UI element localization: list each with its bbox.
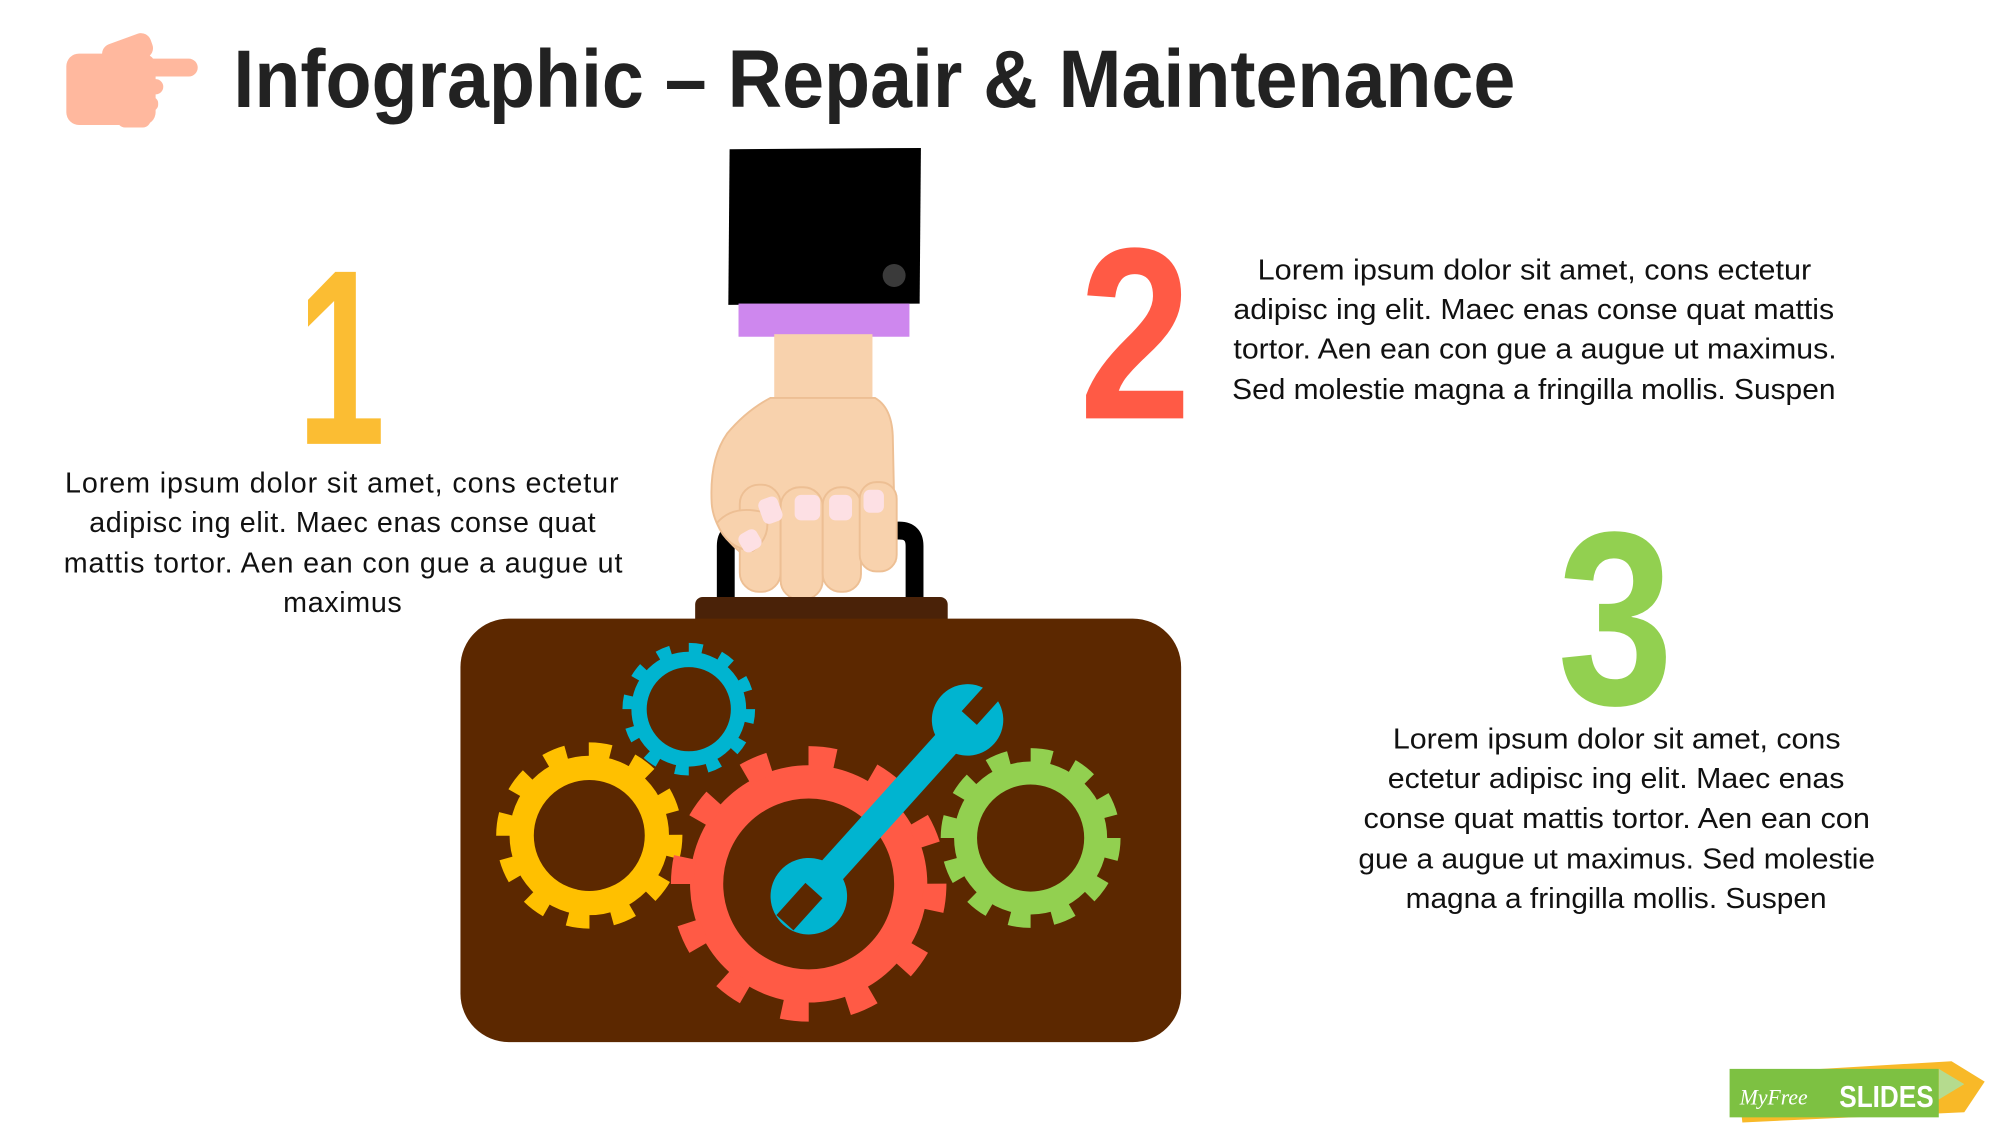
logo: MyFreeSlides <box>1730 1061 1985 1122</box>
text block 3: ectetur adipisc ing elit. Maec enas <box>1388 763 1844 795</box>
number 3: 3 <box>1557 481 1673 757</box>
text block 2 <box>1232 254 1837 406</box>
text block 2: Lorem ipsum dolor sit amet, cons ectetur <box>1258 254 1812 286</box>
text block 3 <box>1358 724 1875 915</box>
gear: teal small <box>629 649 749 769</box>
nails <box>736 490 884 555</box>
handle <box>726 531 915 599</box>
logo: MyFreeSlides: MyFree <box>1739 1086 1808 1110</box>
case <box>460 619 1181 1042</box>
text block 3: conse quat mattis tortor. Aen ean con <box>1364 803 1870 835</box>
text block 3: Lorem ipsum dolor sit amet, cons <box>1393 724 1841 756</box>
icon: wrench <box>755 660 1027 950</box>
text block 3: magna a fringilla mollis. Suspen <box>1406 883 1827 915</box>
lid band <box>695 597 948 628</box>
illustration: hand holding toolbox <box>460 148 1181 1042</box>
text block 1: maximus <box>283 587 402 619</box>
text block 2: adipisc ing elit. Maec enas conse quat mattis <box>1233 294 1834 326</box>
text block 1: adipisc ing elit. Maec enas conse quat <box>89 507 596 539</box>
text block 3: gue a augue ut maximus. Sed molestie <box>1358 844 1875 876</box>
text block 2: Sed molestie magna a fringilla mollis. Suspen <box>1232 374 1835 406</box>
gear: yellow <box>505 751 673 920</box>
gear: green <box>949 756 1112 920</box>
sleeve <box>728 148 921 305</box>
cuff <box>739 304 909 337</box>
text block 2: tortor. Aen ean con gue a augue ut maximus. <box>1233 333 1837 365</box>
icon: pointing hand <box>66 30 198 128</box>
text block 1 <box>64 467 622 619</box>
text block 1: mattis tortor. Aen ean con gue a augue ut <box>64 548 622 580</box>
hand <box>711 334 897 599</box>
logo: MyFreeSlides: SLIDES <box>1839 1080 1934 1114</box>
number 2: 2 <box>1079 196 1191 470</box>
text block 1: Lorem ipsum dolor sit amet, cons ectetur <box>65 467 619 499</box>
number 1: 1 <box>297 218 385 497</box>
title: Infographic – Repair & Maintenance <box>233 34 1515 125</box>
gear: red <box>682 758 935 1010</box>
